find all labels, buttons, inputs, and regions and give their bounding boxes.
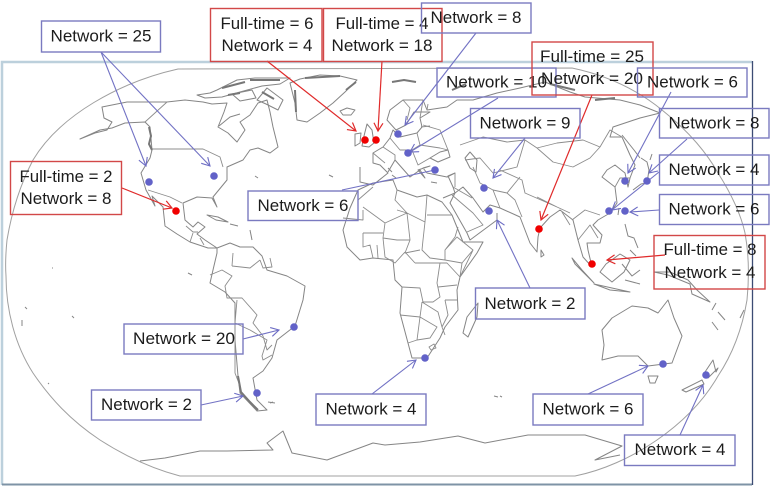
label: full-time 2 network 8 [10, 162, 122, 214]
label: full-time 2 network 8: Full-time = 2 [20, 168, 113, 186]
british columbia coast [149, 127, 152, 150]
arrow: uk full-time 6 [267, 61, 356, 131]
label: network 8 top: Network = 8 [430, 9, 522, 27]
label: network 8 right: Network = 8 [668, 114, 760, 132]
label: full-time 25 network 20 [532, 42, 653, 95]
label: network 4 right [660, 155, 769, 185]
svalbard and arctic islands [392, 80, 615, 100]
africa borders [343, 187, 473, 343]
label: network 25: Network = 25 [50, 28, 152, 46]
full-time location dots [172, 136, 596, 268]
label: full-time 6 network 4: Full-time = 6 [220, 15, 314, 33]
label: full-time 8 network 4 [654, 236, 765, 289]
label: network 25 [42, 21, 160, 52]
south america [210, 243, 305, 411]
taiwan and philippines [618, 208, 638, 256]
central america borders [186, 226, 204, 245]
arrow: network 25 to west usa [101, 52, 146, 166]
label: network 6 bottom [533, 394, 643, 425]
arrow: network 8 to scandinavia [405, 33, 476, 125]
sakhalin and japan [622, 135, 652, 190]
south america borders [210, 253, 272, 386]
sumatra java borneo [572, 254, 640, 292]
label: full-time 25 network 20: Full-time = 25 [540, 48, 644, 66]
label: network 8 right [660, 108, 769, 138]
arrow: network 6 to australia [588, 366, 648, 394]
africa [343, 180, 483, 358]
madagascar [463, 303, 478, 337]
north america [80, 100, 278, 248]
arrow: network 4 to south china [612, 172, 659, 210]
label: network 10 [437, 68, 556, 97]
australia [602, 300, 682, 366]
patagonia coast [238, 376, 258, 410]
iceland [340, 108, 355, 115]
label: network 4 bottom right [624, 435, 735, 466]
tasmania [648, 376, 658, 383]
label: network 2 left [92, 390, 201, 420]
label: network 6 top right [638, 68, 747, 97]
arrow: network 6 to korea [628, 92, 671, 173]
alaska and usa borders [145, 102, 223, 203]
arrow: network 6 to turkey [342, 170, 435, 190]
label: network 6 right [660, 194, 769, 224]
label: network 20 [124, 324, 243, 354]
label: network 6 left: Network = 6 [258, 197, 348, 215]
label: full-time 8 network 4: Full-time = 8 [664, 241, 756, 259]
greenland [290, 75, 357, 122]
label: network 6 top right: Network = 6 [647, 74, 738, 92]
arrow: malaysia full-time 8 [607, 255, 665, 260]
hudson bay detail [219, 114, 240, 126]
network location dots [145, 130, 710, 397]
arrow: network 4 to south africa [372, 360, 416, 394]
arrow: network 8 to japan [649, 139, 687, 173]
label: full-time 2 network 8: Network = 8 [20, 190, 112, 208]
antarctica [140, 431, 622, 461]
arrow: network 20 to brazil [243, 330, 279, 339]
arrow: network 6 to taiwan [630, 210, 659, 212]
arrow: network 4 to new zealand [680, 385, 703, 435]
arrow: network 2 to oman [497, 220, 530, 288]
eurasia and arabia coast [360, 82, 660, 267]
arrow: network 25 to east usa [101, 52, 210, 166]
label: full-time 8 network 4: Network = 4 [664, 264, 756, 282]
label: network 2 middle [476, 288, 585, 319]
arrow: india full-time 25 [541, 95, 592, 220]
label: network 6 right: Network = 6 [668, 200, 760, 218]
sri lanka [541, 250, 544, 257]
arrow: network 9 to iran [493, 138, 525, 178]
new zealand [682, 360, 718, 392]
label: full-time 4 network 18: Network = 18 [332, 37, 432, 55]
label: network 2 middle: Network = 2 [484, 295, 576, 313]
black sea and caspian [430, 150, 477, 172]
label: network 9 [470, 108, 580, 138]
label: network 9: Network = 9 [480, 114, 570, 132]
label: full-time 25 network 20: Network = 20 [541, 70, 643, 88]
arrow: network 2 to chile [201, 396, 243, 405]
arrow: network 10 to central europe [410, 98, 498, 152]
connector lines [101, 33, 703, 435]
label: network 4 bottom [316, 394, 426, 425]
label: network 4 right: Network = 4 [668, 161, 760, 179]
label: full-time 4 network 18: Full-time = 4 [336, 15, 428, 33]
caribbean islands [207, 175, 333, 240]
uk and ireland [355, 124, 374, 147]
label: network 6 bottom: Network = 6 [542, 400, 634, 418]
label: full-time 4 network 18 [324, 8, 442, 62]
arrow: mexico full-time 2 [122, 188, 172, 208]
arrow: uk full-time 4 [378, 61, 382, 131]
label: network 20: Network = 20 [133, 330, 235, 348]
scandinavia coast detail [403, 100, 430, 127]
label: network 6 left [248, 191, 358, 220]
label: network 8 top [422, 3, 531, 33]
label: full-time 6 network 4 [210, 8, 322, 62]
new guinea and pacific islands [654, 272, 744, 330]
label: full-time 6 network 4: Network = 4 [222, 37, 312, 55]
label: network 10: Network = 10 [446, 74, 547, 92]
eurasia borders [373, 125, 630, 240]
canadian arctic islands [197, 78, 290, 110]
small islands [22, 268, 502, 403]
label: network 4 bottom: Network = 4 [326, 400, 416, 418]
label: network 2 left: Network = 2 [101, 396, 192, 414]
mediterranean islands [388, 168, 437, 183]
label: network 4 bottom right: Network = 4 [634, 441, 726, 459]
